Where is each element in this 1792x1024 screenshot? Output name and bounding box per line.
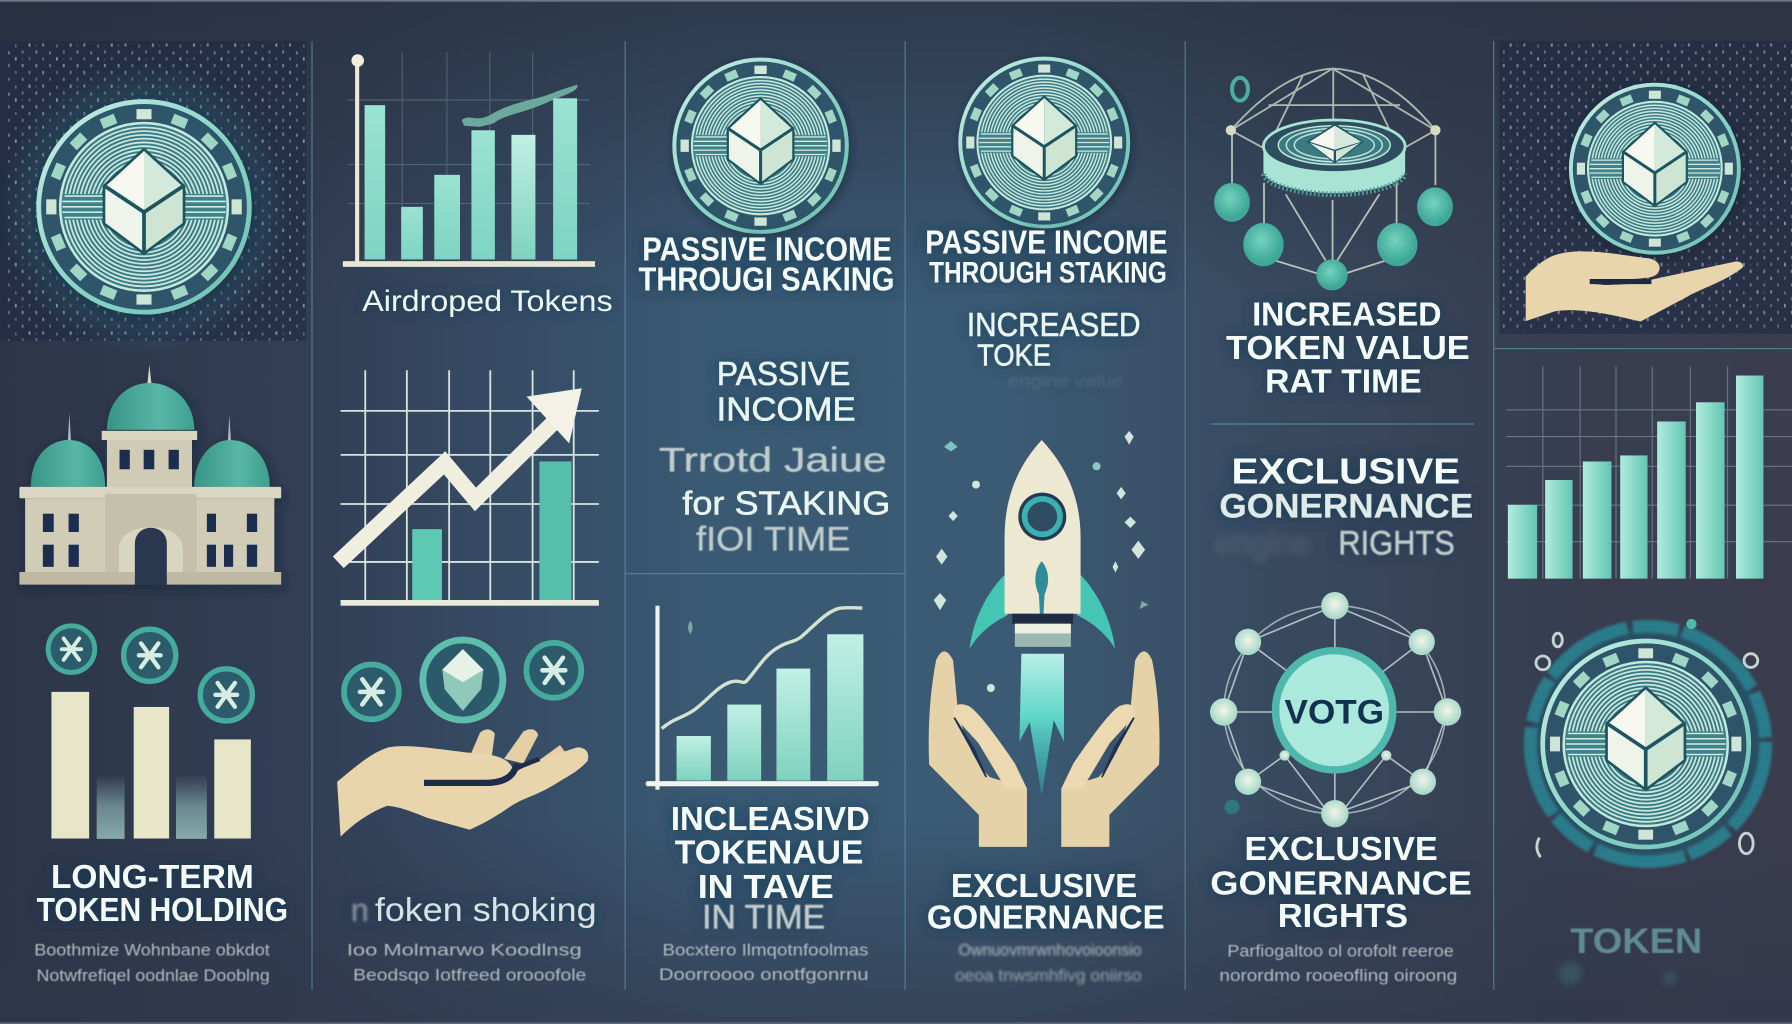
- heading: exclusive governance rights: [1210, 831, 1472, 935]
- description text: Doorroooo onotfgonrnu: [659, 965, 869, 984]
- panel: coin on digital dot field: [0, 41, 306, 353]
- heading: increased token value: TOKEN VALUE: [1226, 330, 1470, 367]
- heading: increased token: TOKE: [977, 338, 1051, 373]
- heading: exclusive governance rights: EXCLUSIVE: [1232, 450, 1460, 491]
- heading: increased token value: [1226, 297, 1470, 400]
- panel: column 4: [925, 59, 1168, 985]
- heading: increased token value: INCREASED: [1252, 297, 1441, 334]
- bar chart: airdropped tokens: [343, 53, 595, 267]
- panel: column 6: [1499, 41, 1792, 985]
- heading: increased token value: TOKENAUE: [675, 835, 863, 872]
- heading: passive income through staking: [639, 232, 895, 298]
- description text: [347, 940, 586, 985]
- label: airdropped tokens: Airdroped Tokens: [362, 285, 613, 318]
- heading: increased token: [967, 307, 1141, 390]
- heading: exclusive governance rights: EXCLUSIVE: [1245, 831, 1438, 868]
- diagram: voting network: [1210, 592, 1461, 827]
- heading: token shoking: n: [351, 892, 369, 928]
- icon: coins over open hand: [337, 640, 588, 837]
- panel: column 5: [1210, 69, 1473, 985]
- heading: exclusive governance rights: RIGHTS: [1338, 524, 1455, 562]
- diagram: voting network: VOTG: [1285, 693, 1384, 731]
- icon: token coin: [674, 59, 847, 232]
- heading: increased token: INCREASED: [967, 307, 1141, 344]
- heading: increased token value: INCLEASIVD: [671, 801, 870, 838]
- description text: Ownuovmrwnhovoioonsio: [959, 940, 1142, 959]
- line chart: rising arrow with bars: [338, 370, 599, 606]
- heading: long-term token holding: TOKEN HOLDING: [37, 892, 288, 929]
- label: token: TOKEN: [1570, 921, 1702, 961]
- description text: Bocxtero Ilmqotnfoolmas: [663, 940, 869, 959]
- heading: exclusive governance: EXCLUSIVE: [951, 868, 1137, 905]
- description text: [34, 940, 270, 985]
- heading: increased token value: IN TAVE: [698, 869, 834, 906]
- description text: [955, 940, 1142, 985]
- heading: token shoking: foken shoking: [375, 892, 597, 929]
- heading: increased token value: RAT TIME: [1265, 363, 1422, 400]
- heading: increased token value: [671, 801, 870, 936]
- subheading: value for staking over time: [659, 441, 890, 558]
- heading: increased token value: IN TIME: [702, 898, 825, 936]
- panel: column 3: [639, 59, 895, 984]
- bar chart: growth curve: [646, 606, 879, 790]
- heading: increased token: engine value: [1008, 371, 1123, 390]
- heading: passive income through staking: THROUGH STAKING: [929, 256, 1167, 289]
- heading: exclusive governance: GONERNANCE: [927, 899, 1165, 936]
- heading: exclusive governance: [927, 868, 1165, 936]
- subheading: value for staking over time: fIOI TIME: [696, 520, 850, 558]
- heading: exclusive governance rights: engine: [1215, 524, 1312, 562]
- heading: passive income through staking: [925, 224, 1168, 289]
- description text: Beodsqo Iotfreed orooofole: [353, 966, 586, 985]
- heading: exclusive governance rights: GONERNANCE: [1219, 488, 1473, 526]
- description text: Notwfrefiqel oodnlae Dooblng: [37, 966, 270, 985]
- heading: passive income: PASSIVE: [717, 356, 850, 393]
- heading: long-term token holding: LONG-TERM: [51, 859, 254, 896]
- description text: Parfiogaltoo ol orofolt reeroe: [1227, 942, 1454, 961]
- heading: exclusive governance rights: [1215, 450, 1473, 562]
- icon: rocket launching from hands: [929, 431, 1160, 847]
- diagram: staked coin network: [1214, 69, 1453, 290]
- description text: Ioo Molmarwo Koodlnsg: [347, 940, 582, 959]
- heading: passive income: INCOME: [717, 392, 856, 429]
- heading: long-term token holding: [37, 859, 288, 929]
- heading: passive income through staking: THROUGI SAKING: [639, 261, 895, 298]
- description text: [1219, 942, 1457, 985]
- icon: domed institution building: [19, 365, 281, 585]
- description text: [659, 940, 869, 984]
- panel: coin held on hand over dot field: [1499, 41, 1792, 334]
- heading: exclusive governance rights: RIGHTS: [1278, 898, 1408, 935]
- panel: column 2: [337, 53, 613, 985]
- panel: column 1: [0, 41, 306, 985]
- heading: passive income: [717, 356, 856, 429]
- heading: passive income through staking: PASSIVE INCOME: [642, 232, 892, 269]
- label: token: [1559, 921, 1702, 985]
- heading: passive income through staking: PASSIVE INCOME: [925, 224, 1168, 261]
- description text: norordmo rooeofling oiroong: [1219, 966, 1457, 985]
- subheading: value for staking over time: Trrotd Jaiue: [659, 441, 887, 479]
- bar chart: rising teal bars: [1506, 367, 1792, 579]
- description text: oeoa tnwsmhfivg oniirso: [955, 966, 1142, 985]
- icon: token coin: [960, 59, 1128, 227]
- subheading: value for staking over time: for STAKING: [682, 485, 890, 522]
- icon: token coin with teal halo: [1530, 619, 1766, 862]
- heading: exclusive governance rights: GONERNANCE: [1210, 866, 1472, 903]
- icon: token coins over bars: [48, 626, 252, 839]
- description text: Boothmize Wohnbane obkdot: [34, 940, 270, 959]
